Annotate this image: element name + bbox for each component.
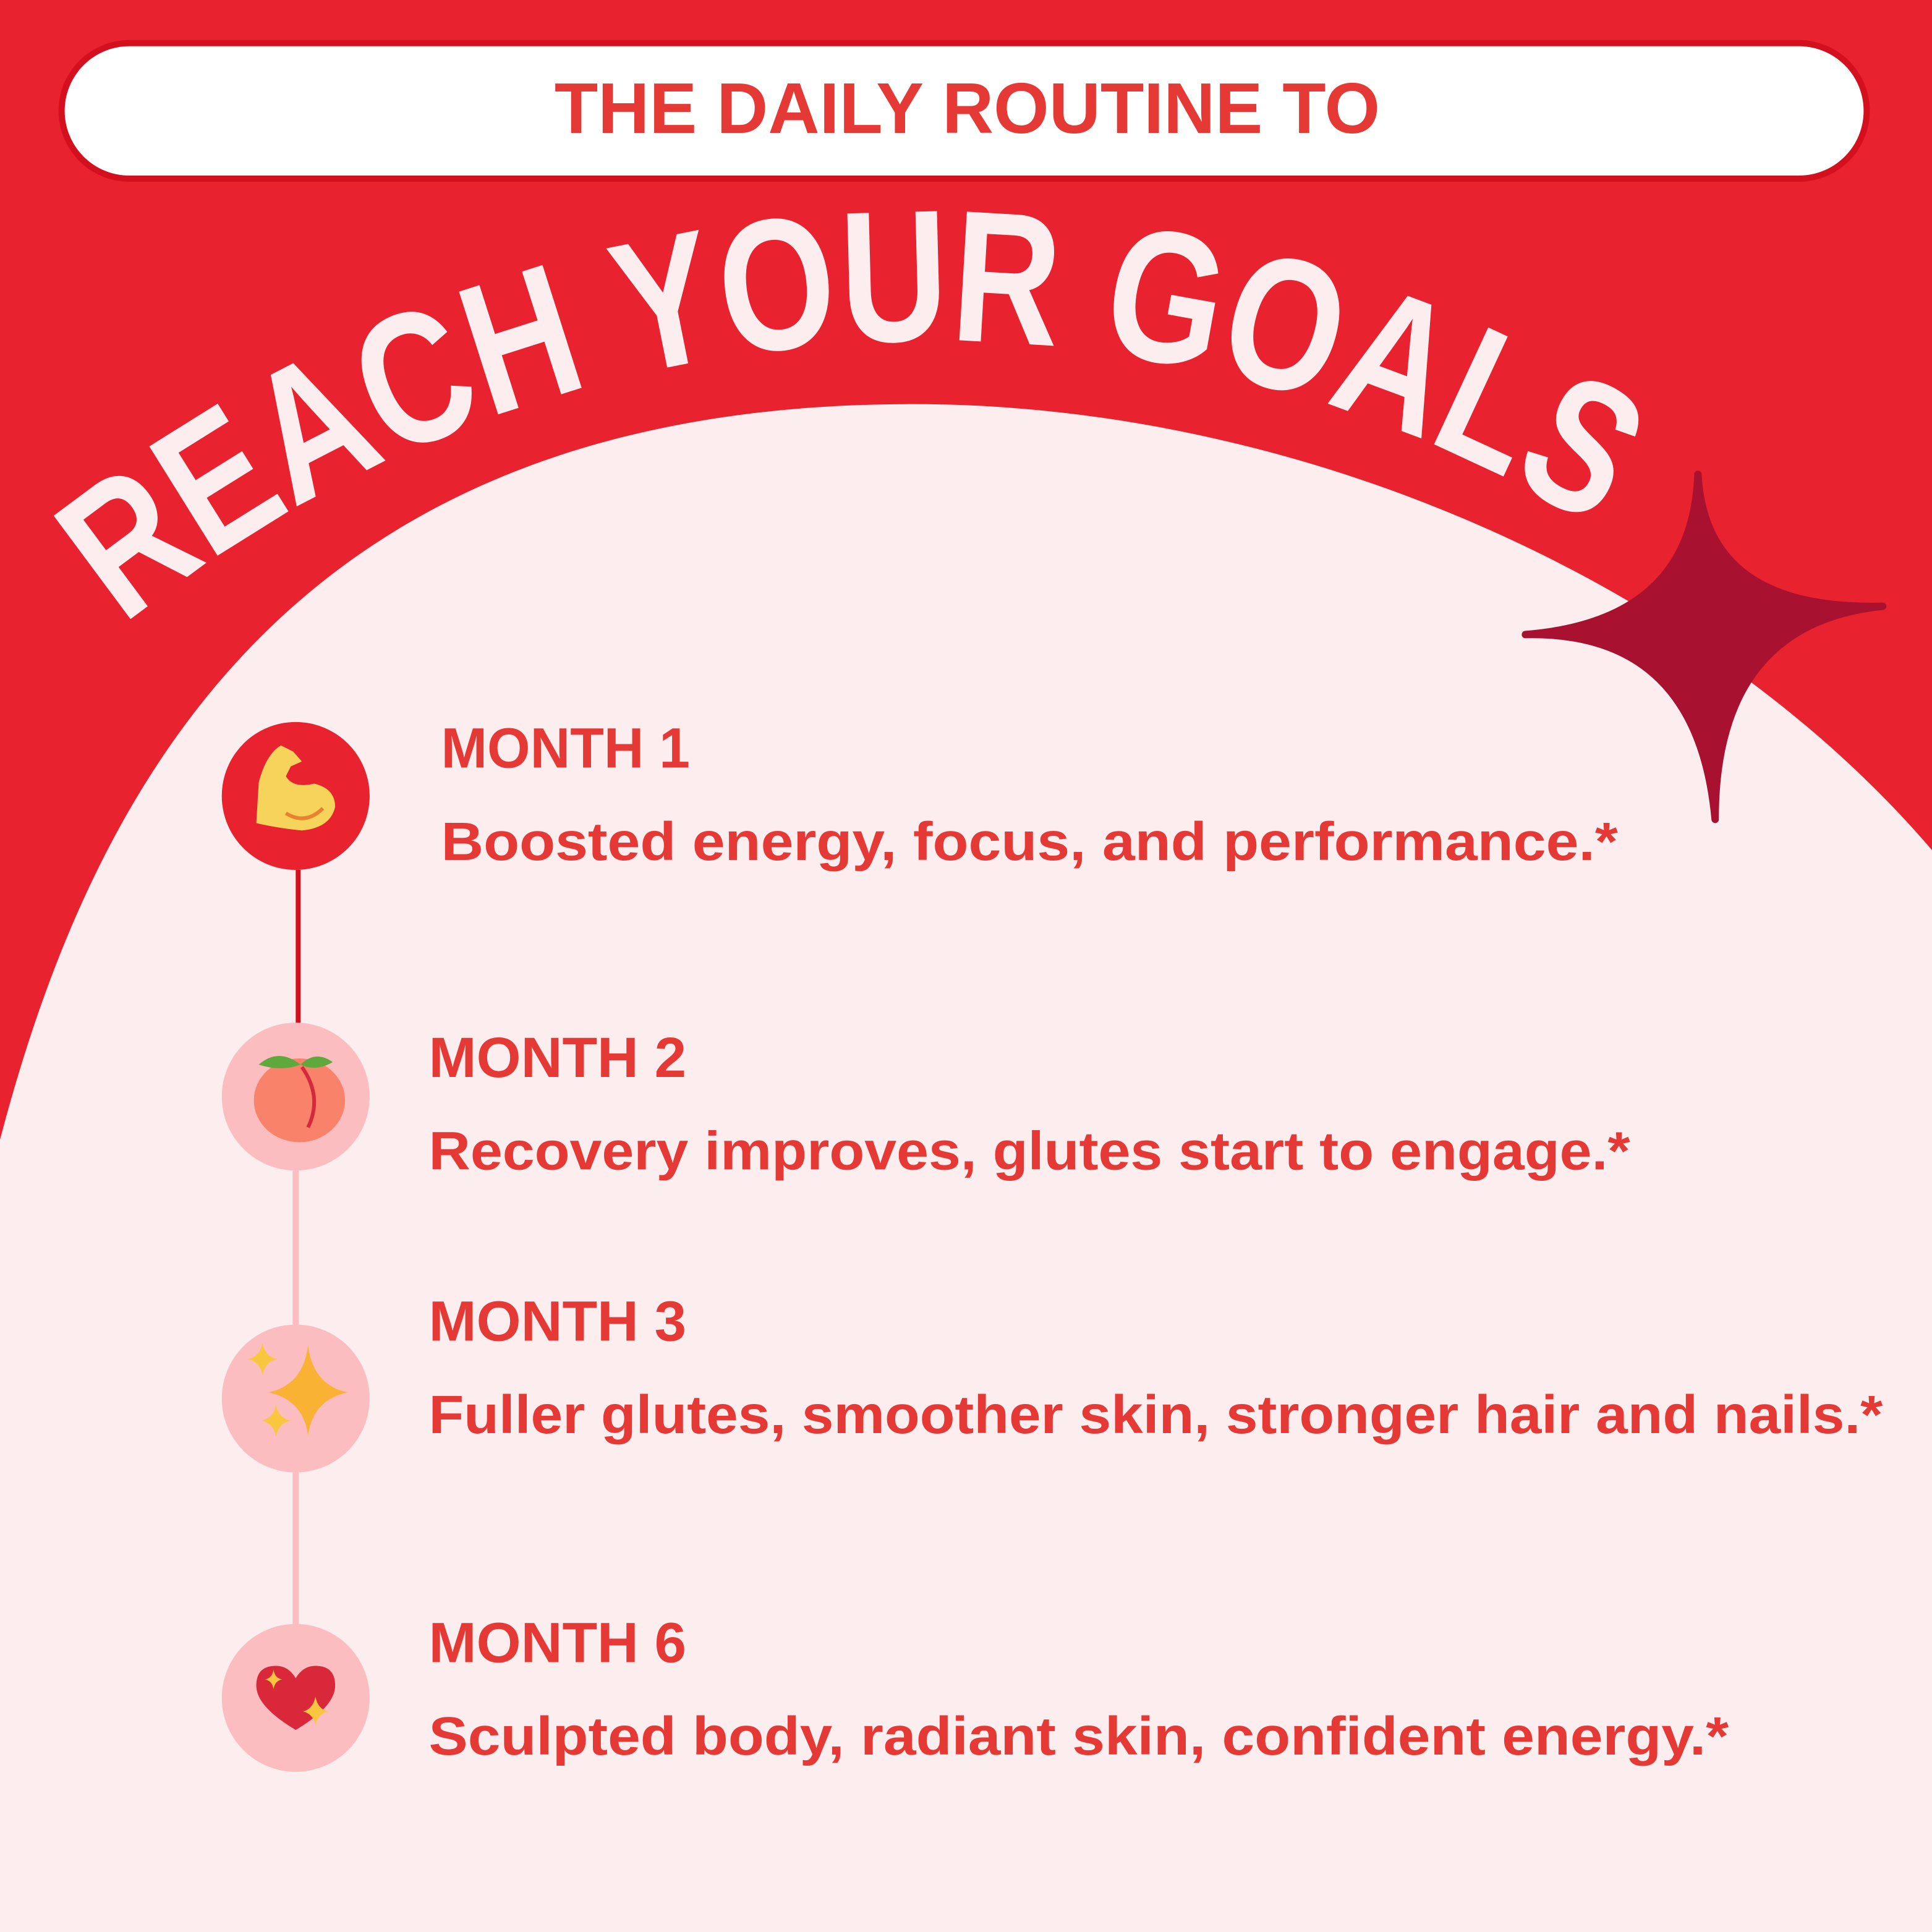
month 3 text [429,1290,1883,1445]
icon: flexed arm [222,722,370,870]
icon: heart [222,1624,370,1772]
month 1 text: MONTH 1 [441,717,690,780]
title pill: THE DAILY ROUTINE TO [555,69,1380,148]
title pill [62,43,1866,179]
month 6 text [429,1612,1729,1766]
month 2 text [429,1026,1631,1181]
curved heading: REACH YOUR GOALS [53,211,1638,619]
month 2 text: MONTH 2 [429,1026,686,1089]
month 2 text: Recovery improves, glutes start to engage.* [429,1120,1631,1181]
month 1 text [441,717,1619,872]
light content area [0,404,1932,1932]
month 6 text: Sculpted body, radiant skin, confident energy.* [429,1706,1729,1766]
month 3 text: MONTH 3 [429,1290,686,1353]
star decoration [1525,474,1883,819]
icon: sparkles [222,1324,370,1473]
month 1 text: Boosted energy, focus, and performance.* [441,811,1619,872]
month 3 text: Fuller glutes, smoother skin, stronger hair and nails.* [429,1384,1883,1445]
icon: peach [222,1023,370,1170]
timeline connectors [296,870,298,1627]
month 6 text: MONTH 6 [429,1612,686,1675]
